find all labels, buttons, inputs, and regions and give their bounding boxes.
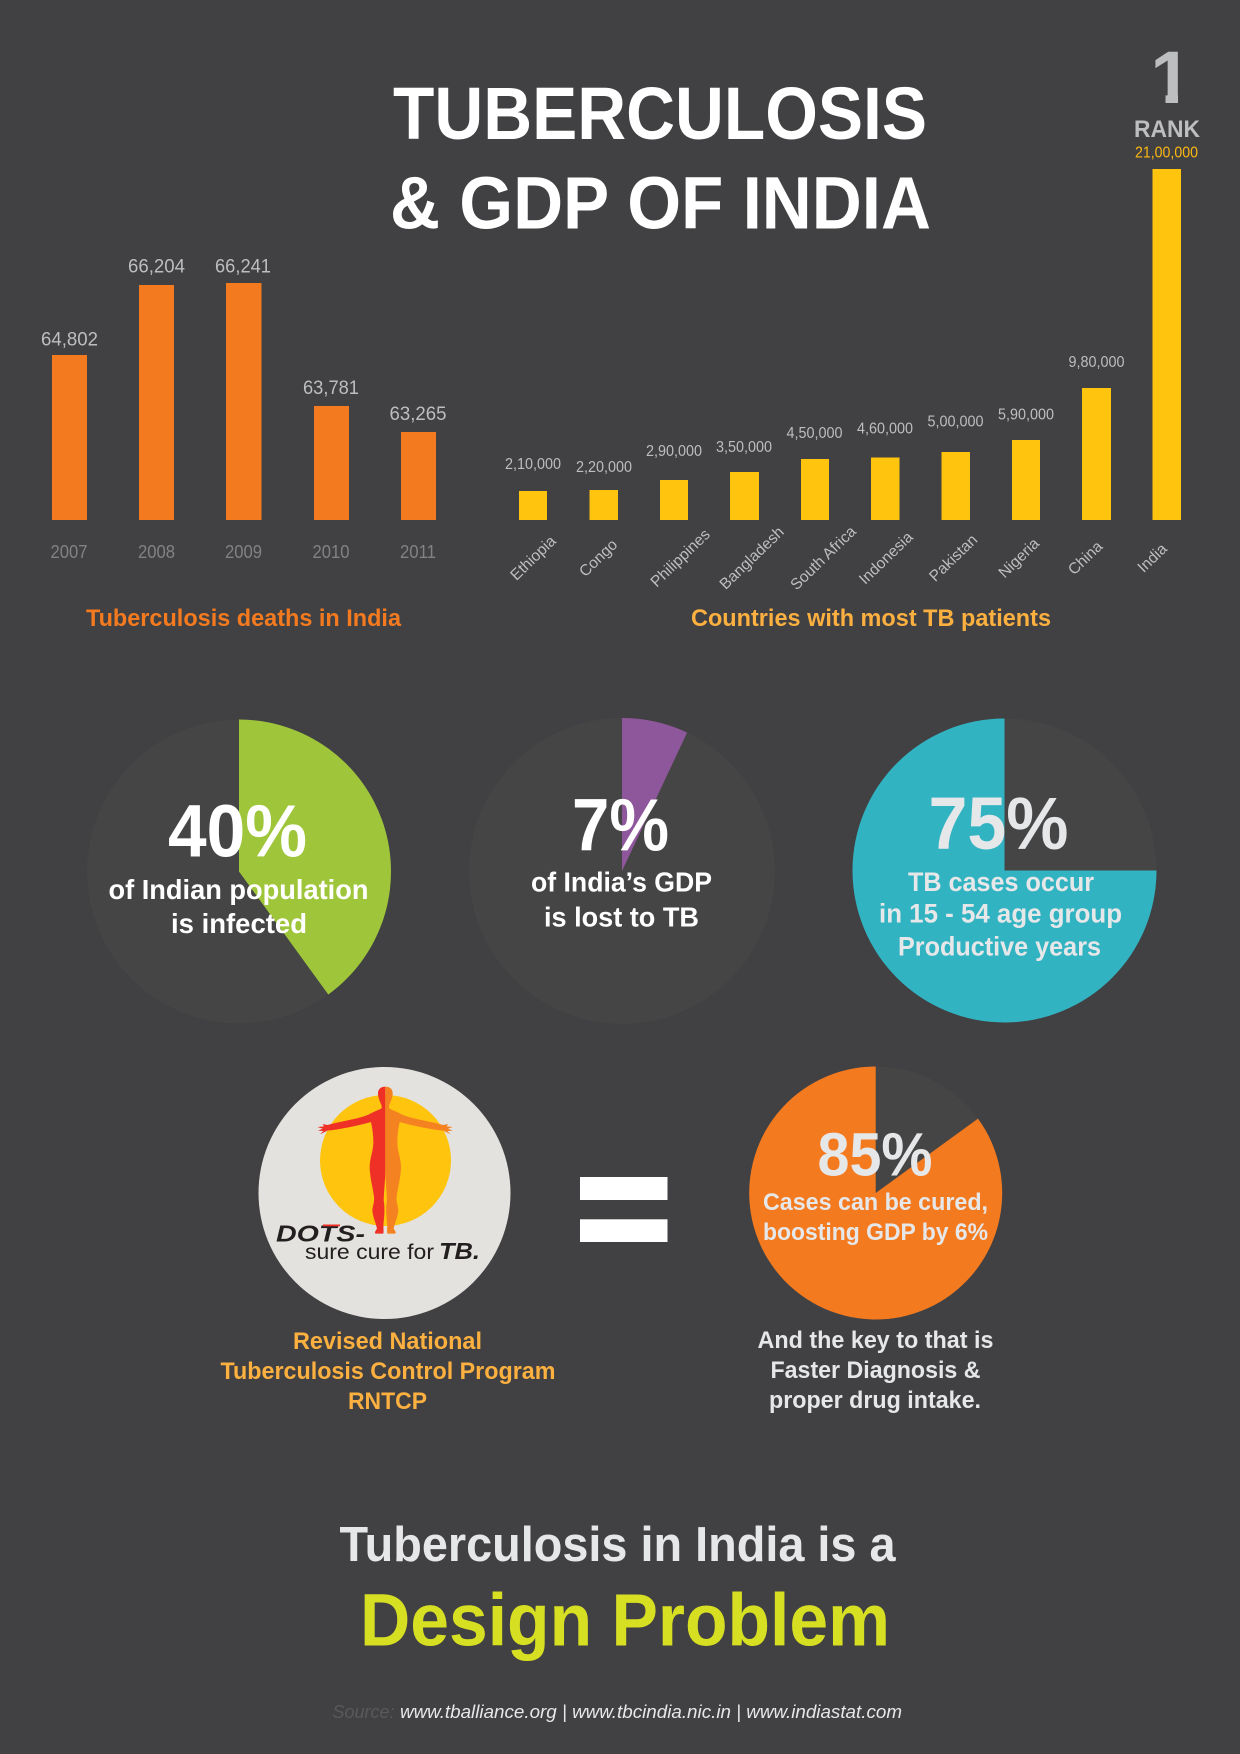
bar values: 9,80,000: [1068, 354, 1125, 371]
country labels: Indonesia: [856, 529, 917, 588]
caption: [763, 1189, 988, 1246]
pie slice 85%: [749, 1066, 1002, 1320]
conclusion heading: Design Problem: [360, 1578, 890, 1662]
bar values: 3,50,000: [716, 439, 772, 456]
chart caption: Tuberculosis deaths in India: [86, 605, 402, 632]
caption: of India’s GDP: [531, 866, 712, 898]
bar values: 2,10,000: [505, 456, 561, 473]
panel: 40% infected pie: [87, 720, 391, 1024]
bar values: 2,90,000: [646, 443, 702, 460]
pie base: [852, 718, 1156, 1022]
year labels: 2010: [312, 541, 350, 562]
caption: of Indian population: [108, 874, 368, 905]
title: TUBERCULOSIS: [393, 72, 927, 155]
bar values: 63,265: [390, 403, 447, 425]
logo wordmark: TB.: [439, 1238, 480, 1264]
bar values: 66,241: [215, 256, 271, 278]
conclusion heading: [340, 1518, 896, 1662]
country labels: Philippines: [648, 526, 714, 591]
logo wordmark: DOTS-: [276, 1220, 365, 1246]
logo wordmark: [276, 1220, 480, 1264]
bar values: 2,20,000: [576, 459, 632, 476]
country labels: China: [1065, 538, 1106, 579]
panel: DOTS logo: [220, 1067, 556, 1415]
caption: [108, 874, 368, 939]
title: & GDP OF INDIA: [390, 162, 931, 244]
country labels: Nigeria: [996, 535, 1043, 582]
country labels: Ethiopia: [507, 532, 560, 584]
bars: yearly deaths: [52, 283, 436, 520]
country labels: [507, 523, 1171, 594]
country labels: India: [1135, 540, 1171, 576]
rank label: RANK: [1134, 116, 1201, 143]
sun: [320, 1095, 451, 1226]
caption: is lost to TB: [544, 902, 699, 932]
country labels: South Africa: [788, 523, 860, 594]
year labels: 2011: [400, 541, 436, 562]
panel: 75% age group pie: [852, 718, 1156, 1022]
bar values: 4,60,000: [857, 420, 913, 438]
program caption: Revised National: [293, 1328, 482, 1355]
stat: 75%: 75%: [928, 782, 1068, 865]
conclusion heading: Tuberculosis in India is a: [340, 1518, 896, 1572]
source line: www.tballiance.org | www.tbcindia.nic.in | www.indiastat.com: [400, 1702, 902, 1722]
key note: And the key to that is: [758, 1327, 994, 1354]
caption: boosting GDP by 6%: [763, 1219, 988, 1246]
bar values: 5,00,000: [928, 414, 984, 430]
year labels: 2007: [50, 541, 88, 562]
country labels: Congo: [576, 536, 621, 580]
program caption: RNTCP: [348, 1388, 427, 1415]
stat: 85%: 85%: [818, 1120, 932, 1188]
caption: Cases can be cured,: [763, 1189, 988, 1216]
logo disc: [258, 1067, 510, 1319]
bar values: [505, 354, 1125, 476]
key note: proper drug intake.: [769, 1387, 981, 1414]
pie base: [87, 720, 391, 1024]
year labels: 2008: [138, 541, 175, 562]
rank number: 1: [1150, 36, 1192, 119]
stat: 40%: 40%: [168, 790, 307, 872]
country labels: Pakistan: [926, 532, 981, 585]
bar values: 5,90,000: [998, 406, 1054, 424]
program caption: Tuberculosis Control Program: [220, 1358, 556, 1385]
caption: TB cases occur: [908, 867, 1094, 897]
bar values: 63,781: [303, 377, 359, 399]
india value: 21,00,000: [1135, 144, 1198, 162]
bar values: 4,50,000: [786, 425, 843, 442]
pie slice 7%: [622, 718, 687, 871]
year labels: 2009: [225, 541, 262, 562]
panel: 7% GDP lost pie: [469, 718, 775, 1024]
year labels: [50, 541, 436, 562]
pie base: [749, 1066, 1002, 1320]
program caption: [220, 1328, 556, 1415]
bar chart: tuberculosis deaths in India: [41, 256, 447, 632]
bar values: [41, 256, 447, 425]
pie slice 75%: [852, 718, 1156, 1022]
chart caption: Countries with most TB patients: [691, 605, 1051, 632]
icon: human figure: [317, 1087, 453, 1234]
country labels: Bangladesh: [717, 524, 788, 593]
caption: in 15 - 54 age group: [879, 898, 1122, 928]
key note: Faster Diagnosis &: [770, 1357, 980, 1384]
bar chart: countries with most TB patients: [505, 36, 1201, 632]
panel: 85% cured pie: [749, 1066, 1002, 1414]
title: [390, 72, 931, 244]
caption: [879, 867, 1122, 962]
pie base: [469, 718, 775, 1024]
bar values: 66,204: [128, 256, 185, 278]
logo wordmark: sure cure for: [305, 1241, 434, 1264]
icon: equals sign: [580, 1177, 668, 1242]
caption: is infected: [171, 908, 307, 939]
stat: 7%: 7%: [572, 784, 669, 866]
bars: patients by country: [519, 169, 1181, 520]
source line: Source:: [332, 1702, 394, 1722]
caption: Productive years: [898, 932, 1101, 962]
pie slice 40%: [239, 720, 391, 994]
bar values: 64,802: [41, 328, 98, 350]
key note: [758, 1327, 994, 1414]
caption: [531, 866, 712, 932]
